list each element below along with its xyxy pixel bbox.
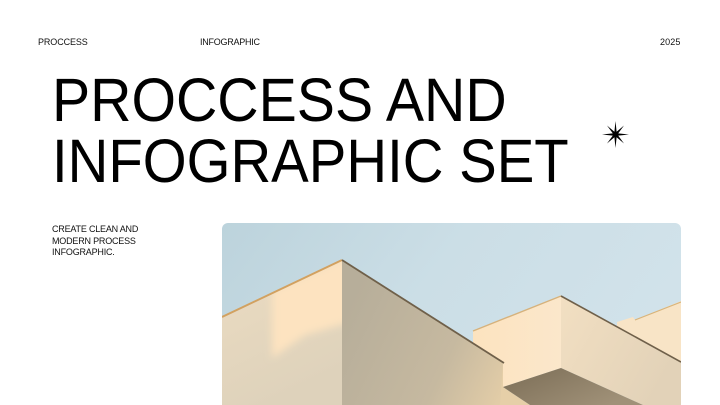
description text: [52, 224, 138, 257]
main building right wall: [342, 260, 504, 405]
roof edges: [222, 260, 681, 363]
title: PROCCESS AND: [52, 66, 507, 134]
upper block underside: [503, 368, 643, 405]
sunlit patch on wall: [270, 261, 342, 356]
description text: INFOGRAPHIC.: [52, 247, 115, 257]
main building left wall: [222, 260, 342, 405]
upper block right face: [561, 296, 681, 405]
icon: eight-point star: [602, 121, 629, 148]
back building: [617, 301, 681, 362]
header label: year: 2025: [660, 37, 680, 47]
title: INFOGRAPHIC SET: [52, 127, 569, 195]
header label: infographic: INFOGRAPHIC: [200, 37, 260, 47]
wall section below block: [502, 370, 530, 405]
description text: MODERN PROCESS: [52, 236, 136, 246]
upper block left face: [473, 296, 561, 387]
sky: [222, 223, 681, 405]
title: [52, 66, 569, 195]
photo: building against sky: [222, 223, 681, 405]
header label: proccess: PROCCESS: [38, 37, 88, 47]
description text: CREATE CLEAN AND: [52, 224, 138, 234]
